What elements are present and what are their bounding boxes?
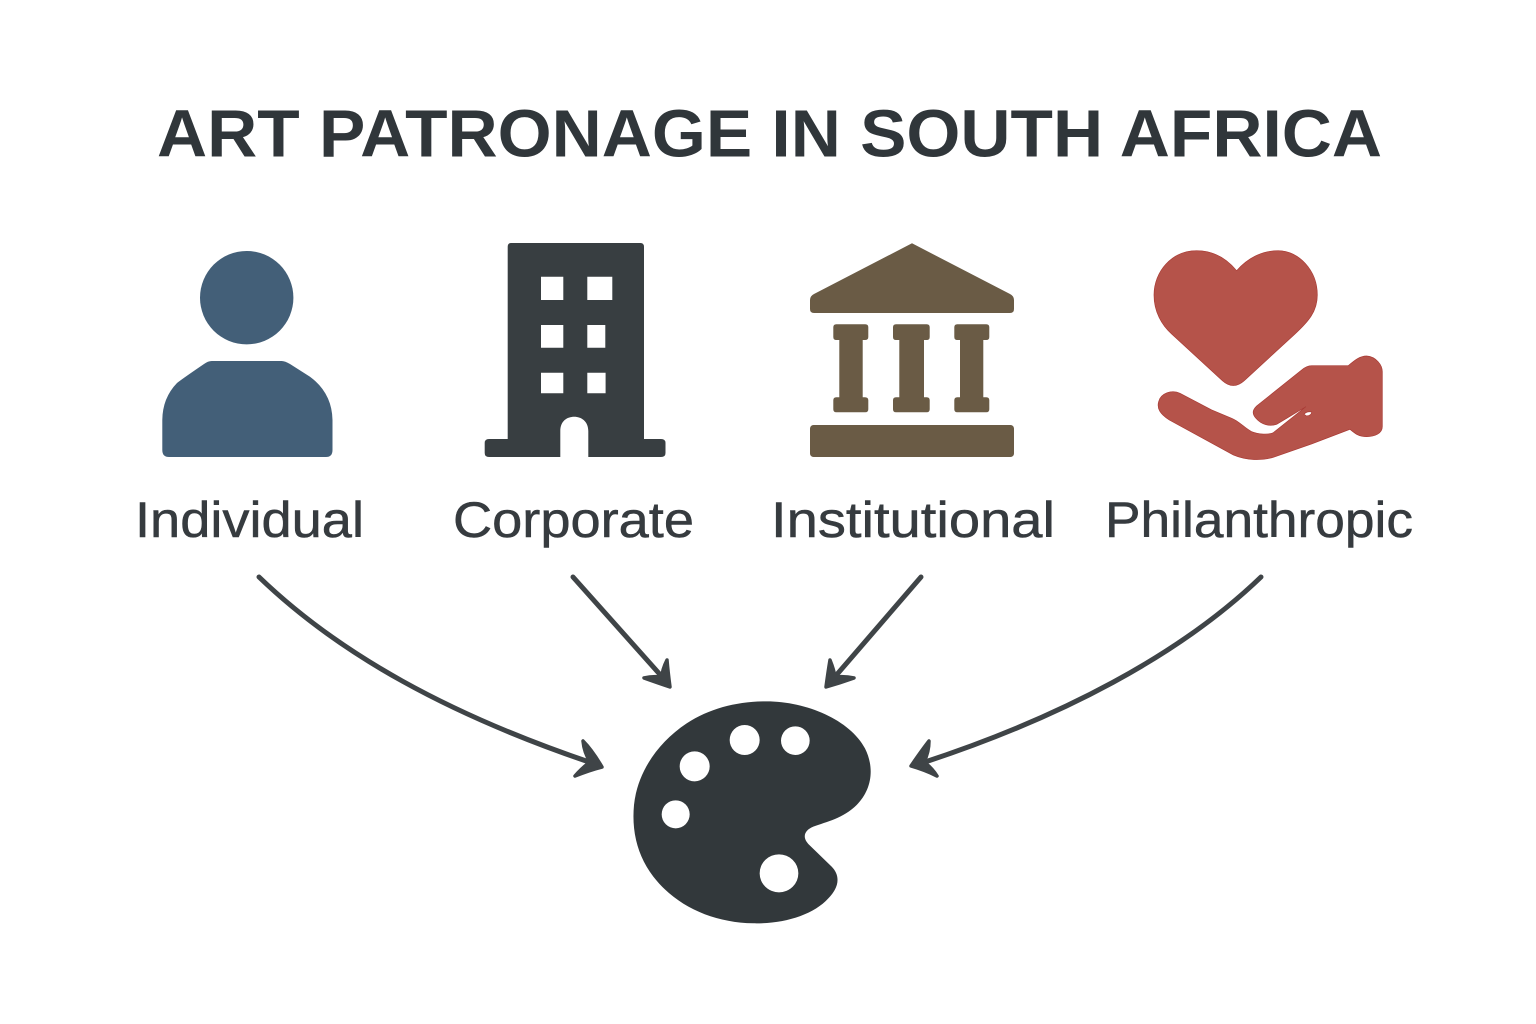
label: Corporate: Corporate	[453, 492, 694, 548]
arrow: philanthropic to palette	[911, 577, 1261, 776]
arrow: corporate to palette	[573, 577, 670, 687]
icon: corporate building	[485, 243, 666, 457]
arrow: institutional to palette	[826, 577, 921, 687]
icon: institutional columns	[810, 243, 1014, 457]
icon: individual person	[162, 251, 332, 457]
icon: artist palette	[633, 701, 871, 923]
arrow: individual to palette	[259, 577, 602, 776]
label: Individual: Individual	[135, 492, 364, 548]
label: Philanthropic: Philanthropic	[1105, 492, 1413, 548]
label: Institutional: Institutional	[771, 492, 1055, 548]
icon: philanthropic heart and hand	[1154, 251, 1382, 460]
title: ART PATRONAGE IN SOUTH AFRICA	[157, 96, 1382, 172]
